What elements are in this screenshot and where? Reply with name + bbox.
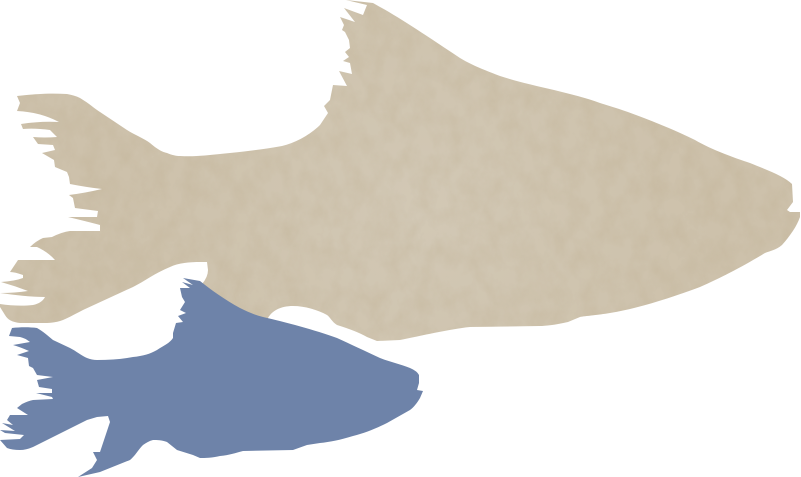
small blue fish silhouette: [0, 278, 423, 477]
large tan fish silhouette: [0, 0, 800, 341]
